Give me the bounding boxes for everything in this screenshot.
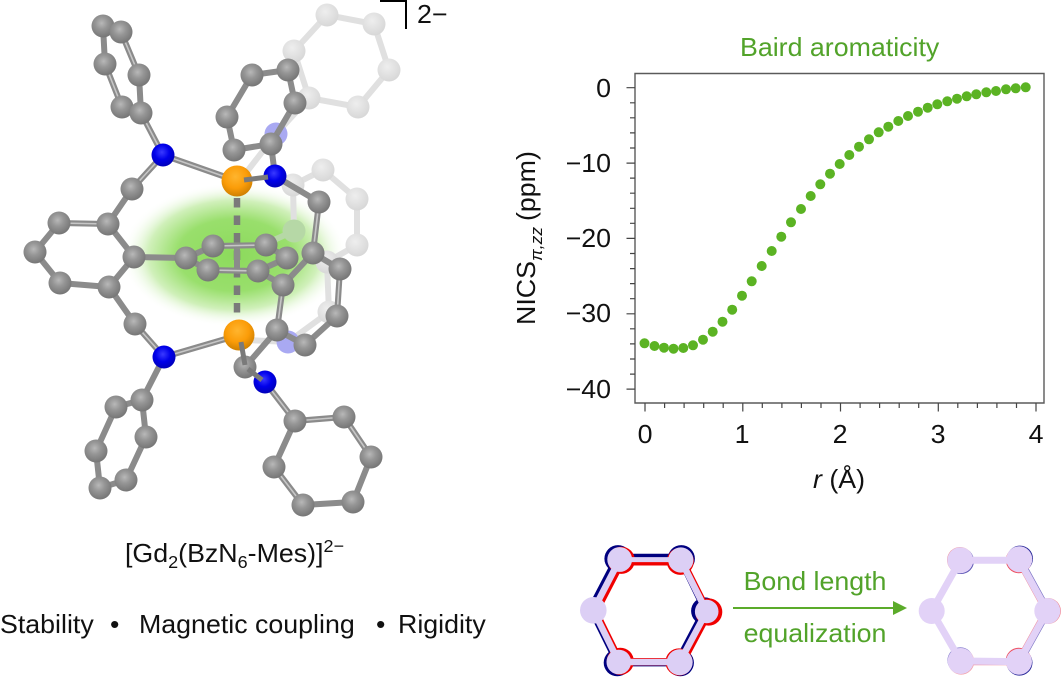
properties line: Rigidity	[398, 609, 487, 639]
front bonds	[241, 177, 268, 380]
properties line: •	[110, 609, 119, 639]
compound formula label: [Gd	[125, 538, 168, 568]
nitrogen atoms	[152, 144, 286, 394]
plot frame	[635, 74, 1044, 403]
properties line: Stability	[0, 609, 95, 639]
x axis tick labels	[638, 419, 1043, 449]
y axis tick labels: −40	[566, 374, 611, 404]
molecule: [Gd2(BzN6-Mes)]2- crystal structure	[24, 4, 400, 516]
equalized ring bonds and atoms	[932, 560, 1047, 662]
x axis tick labels: 1	[735, 419, 749, 449]
x axis ticks	[645, 403, 1036, 412]
gadolinium atoms	[222, 166, 254, 350]
y axis tick labels: 0	[596, 73, 611, 103]
compound formula label: 2	[168, 552, 178, 572]
y axis ticks	[626, 88, 635, 389]
y axis title: NICS	[511, 261, 541, 325]
x axis tick labels: 4	[1029, 419, 1043, 449]
properties line: Magnetic coupling	[139, 609, 355, 639]
properties line	[0, 609, 487, 639]
y axis title	[511, 151, 546, 325]
compound formula label: (BzN	[178, 538, 238, 568]
y axis title: (ppm)	[511, 151, 541, 221]
Gd-Gd dashed interaction	[234, 198, 240, 320]
arrow: bond length equalization	[733, 601, 907, 615]
diagram: unequal bond-length ring	[580, 545, 722, 676]
label: Bond length: Bond length	[744, 566, 886, 596]
averaged ring	[620, 557, 681, 562]
compound formula label: -Mes)]	[248, 538, 323, 568]
charge label: 2−	[417, 0, 448, 29]
properties line: •	[376, 609, 385, 639]
scatter chart: NICS vs r	[511, 73, 1044, 494]
x axis tick labels: 3	[931, 419, 945, 449]
y axis title: π,zz	[526, 227, 546, 261]
chart title: Baird aromaticity	[740, 32, 940, 62]
x axis title: r (Å)	[813, 464, 865, 494]
label: equalization: equalization	[744, 618, 886, 648]
green aromatic glow	[121, 183, 347, 327]
faded background atoms and bonds	[242, 4, 400, 354]
y axis tick labels: −10	[566, 148, 611, 178]
y axis tick labels: −30	[566, 298, 611, 328]
y axis tick labels: −20	[566, 223, 611, 253]
residual blue and red edges	[947, 546, 1061, 676]
blue geometry	[591, 545, 718, 676]
red geometry	[594, 547, 722, 676]
diagram: equalized ring	[919, 546, 1061, 676]
y axis tick labels	[566, 73, 611, 404]
bonds	[35, 26, 371, 505]
carbon atoms	[24, 14, 382, 516]
data points	[640, 82, 1031, 354]
x axis tick labels: 0	[638, 419, 652, 449]
charge bracket	[380, 1, 406, 29]
compound formula label: 2−	[323, 536, 344, 556]
x axis tick labels: 2	[833, 419, 847, 449]
compound formula label: 6	[238, 552, 248, 572]
